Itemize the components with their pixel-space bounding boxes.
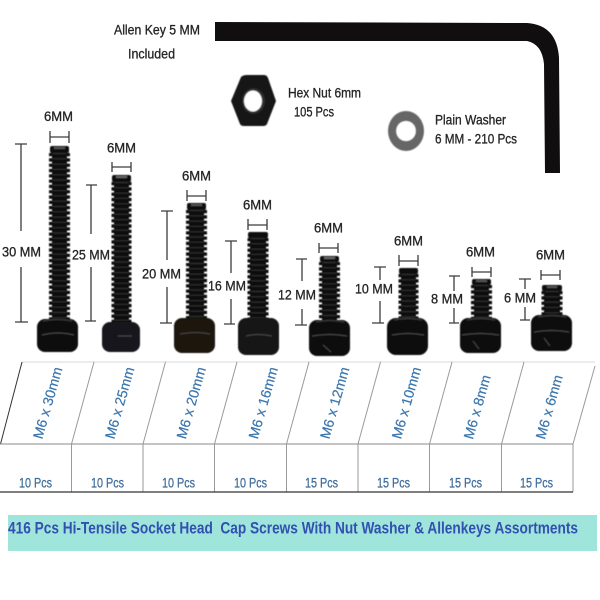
quantity labels: 15 Pcs: [305, 476, 338, 490]
icon: hex nut: [231, 75, 276, 126]
bolt: M6 x 30mm: [37, 146, 78, 352]
bolt: M6 x 25mm: [102, 175, 140, 352]
label: allen key: [114, 22, 200, 62]
label: allen key: Included: [128, 46, 175, 62]
size labels: M6 x 25mm: [102, 365, 137, 441]
dimension: 16 MM bolt: 16 MM: [208, 278, 246, 294]
quantity labels: 10 Pcs: [162, 476, 195, 490]
dimension: 12 MM bolt: [278, 220, 343, 325]
size labels: M6 x 20mm: [173, 365, 209, 441]
quantity labels: 10 Pcs: [19, 476, 52, 490]
quantity labels: 15 Pcs: [520, 476, 553, 490]
quantity labels: 10 Pcs: [91, 476, 124, 490]
size labels: M6 x 16mm: [245, 365, 281, 441]
dimension: 10 MM bolt: 6MM: [394, 234, 423, 248]
dimension: 20 MM bolt: 6MM: [182, 168, 211, 184]
dimension: 10 MM bolt: 10 MM: [355, 282, 393, 296]
size labels: M6 x 30mm: [30, 365, 65, 441]
dimension: 12 MM bolt: 12 MM: [278, 288, 316, 302]
dimension: 30 MM bolt: [2, 109, 73, 322]
dimension: 10 MM bolt: [355, 234, 423, 323]
quantity labels: [19, 476, 553, 490]
table: size and quantity grid: [0, 362, 595, 492]
dimension: 6 MM bolt: 6MM: [536, 248, 565, 262]
bolt: M6 x 8mm: [460, 279, 501, 353]
size labels: M6 x 12mm: [317, 365, 352, 441]
dimension: 20 MM bolt: 20 MM: [142, 266, 181, 282]
dimension: 30 MM bolt: 30 MM: [2, 244, 41, 260]
icon: plain washer: [388, 111, 424, 151]
dimension: 16 MM bolt: 6MM: [243, 198, 272, 212]
size labels: M6 x 8mm: [460, 373, 494, 441]
quantity labels: 15 Pcs: [377, 476, 410, 490]
bolt: M6 x 16mm: [238, 232, 279, 355]
dimension: 30 MM bolt: 6MM: [44, 109, 73, 124]
bolt: M6 x 12mm: [309, 256, 350, 356]
bolt: M6 x 10mm: [387, 268, 428, 355]
bolt: M6 x 20mm: [174, 203, 215, 353]
dimension: 16 MM bolt: [208, 198, 272, 324]
icon: allen key: [215, 22, 560, 173]
banner: [8, 515, 597, 551]
size labels: M6 x 10mm: [388, 365, 424, 441]
size labels: M6 x 6mm: [532, 373, 566, 441]
label: allen key: Allen Key 5 MM: [114, 22, 200, 38]
bolt: M6 x 6mm: [531, 285, 572, 351]
dimension: 8 MM bolt: [431, 244, 495, 323]
dimension: 8 MM bolt: 6MM: [466, 244, 495, 260]
dimension: 6 MM bolt: 6 MM: [504, 290, 536, 306]
dimension: 6 MM bolt: [504, 248, 565, 320]
dimension: 8 MM bolt: 8 MM: [431, 292, 463, 306]
dimension: 12 MM bolt: 6MM: [314, 220, 343, 236]
label: hex nut: Hex Nut 6mm: [288, 86, 361, 100]
dimension: 25 MM bolt: [72, 140, 136, 321]
label: plain washer: [435, 112, 517, 146]
label: hex nut: [288, 86, 361, 120]
quantity labels: 15 Pcs: [449, 476, 482, 490]
dimension: 20 MM bolt: [142, 168, 211, 323]
dimension: 25 MM bolt: 25 MM: [72, 248, 110, 262]
quantity labels: 10 Pcs: [234, 476, 267, 490]
label: plain washer: Plain Washer: [435, 112, 506, 128]
dimension: 25 MM bolt: 6MM: [107, 140, 136, 156]
size labels: [30, 365, 566, 441]
label: hex nut: 105 Pcs: [294, 104, 334, 120]
label: plain washer: 6 MM - 210 Pcs: [435, 132, 517, 146]
